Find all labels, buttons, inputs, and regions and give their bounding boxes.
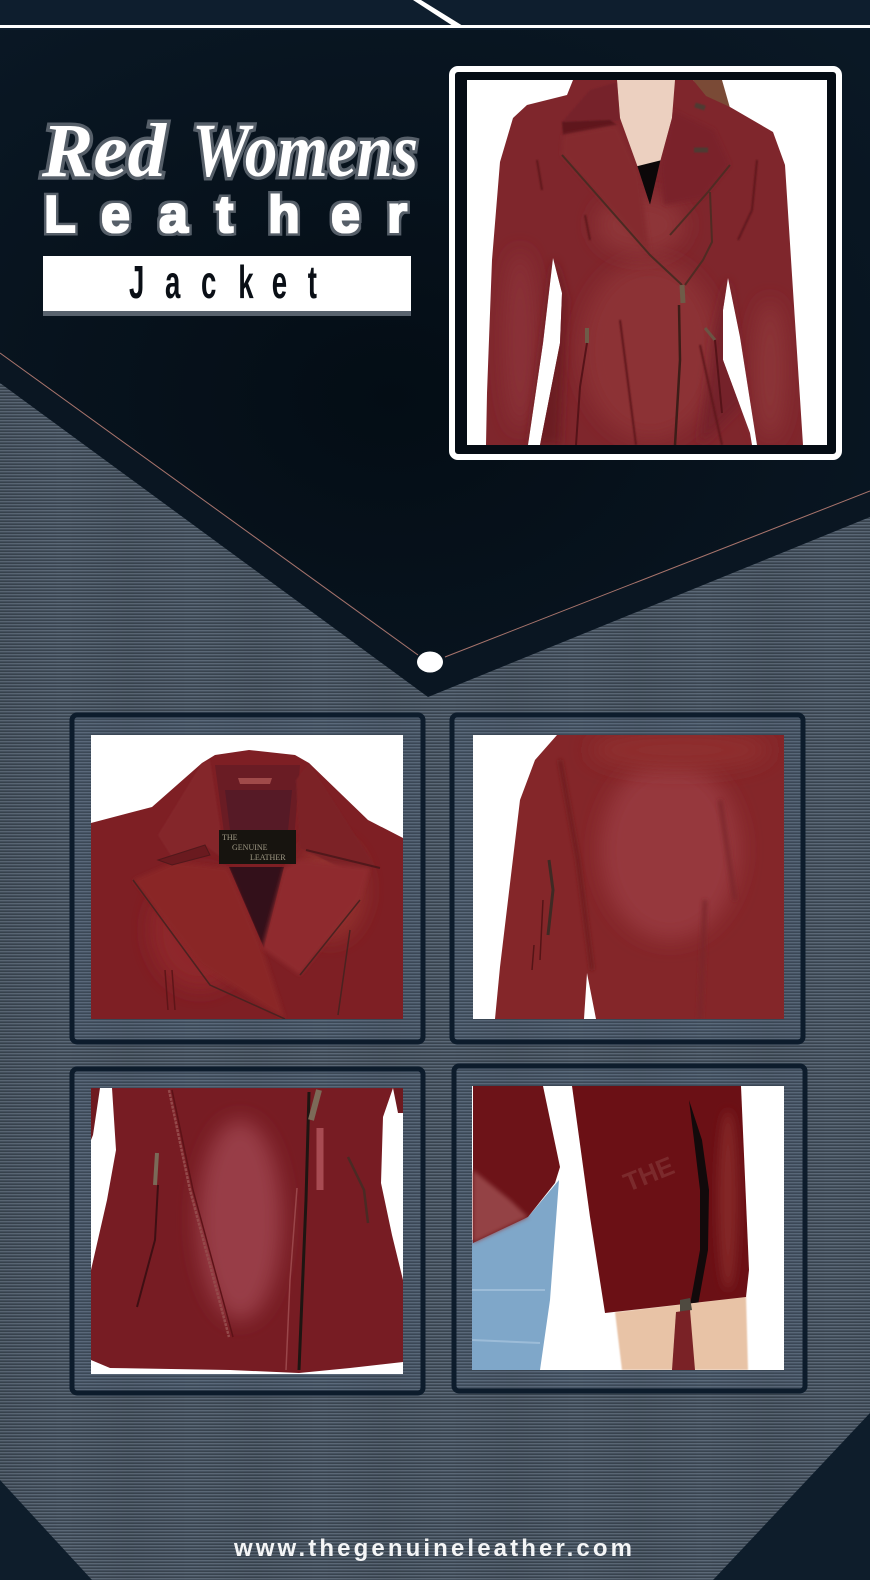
detail panel: collar bbox=[72, 715, 423, 1042]
detail panel: sleeve zip bbox=[454, 1066, 805, 1391]
woven label text bbox=[222, 834, 286, 860]
title line: Red Womens: Womens bbox=[192, 109, 418, 193]
detail panel: back and sleeve bbox=[452, 715, 803, 1042]
main photo frame bbox=[452, 69, 839, 457]
title line: Red Womens: Red bbox=[41, 109, 167, 193]
title line: Red Womens bbox=[41, 109, 418, 193]
photo: sleeve cuff with zipper bbox=[472, 1086, 752, 1370]
jacket banner bbox=[43, 256, 411, 316]
bottom corner triangles bbox=[0, 1413, 870, 1580]
woven label text: GENUINE bbox=[232, 843, 268, 852]
banner text: Jacket bbox=[129, 258, 317, 309]
woven label text: THE bbox=[222, 833, 238, 842]
faint watermark: THE bbox=[619, 1150, 678, 1198]
photo: collar and label bbox=[91, 735, 403, 1025]
woven label text: LEATHER bbox=[250, 853, 286, 862]
thin accent lines and dot bbox=[0, 353, 870, 672]
photo: full jacket front bbox=[480, 78, 810, 448]
top white rule with slash bbox=[0, 0, 870, 28]
detail panel: front zip and pockets bbox=[72, 1069, 423, 1393]
dark header panel bbox=[0, 0, 870, 697]
photo: back of jacket bbox=[473, 730, 784, 1019]
website url: www.thegenuineleather.com bbox=[233, 1535, 632, 1562]
title line: Leather: Leather bbox=[44, 186, 407, 244]
title bbox=[41, 109, 418, 244]
photo: waist and zipper bbox=[91, 1088, 403, 1378]
